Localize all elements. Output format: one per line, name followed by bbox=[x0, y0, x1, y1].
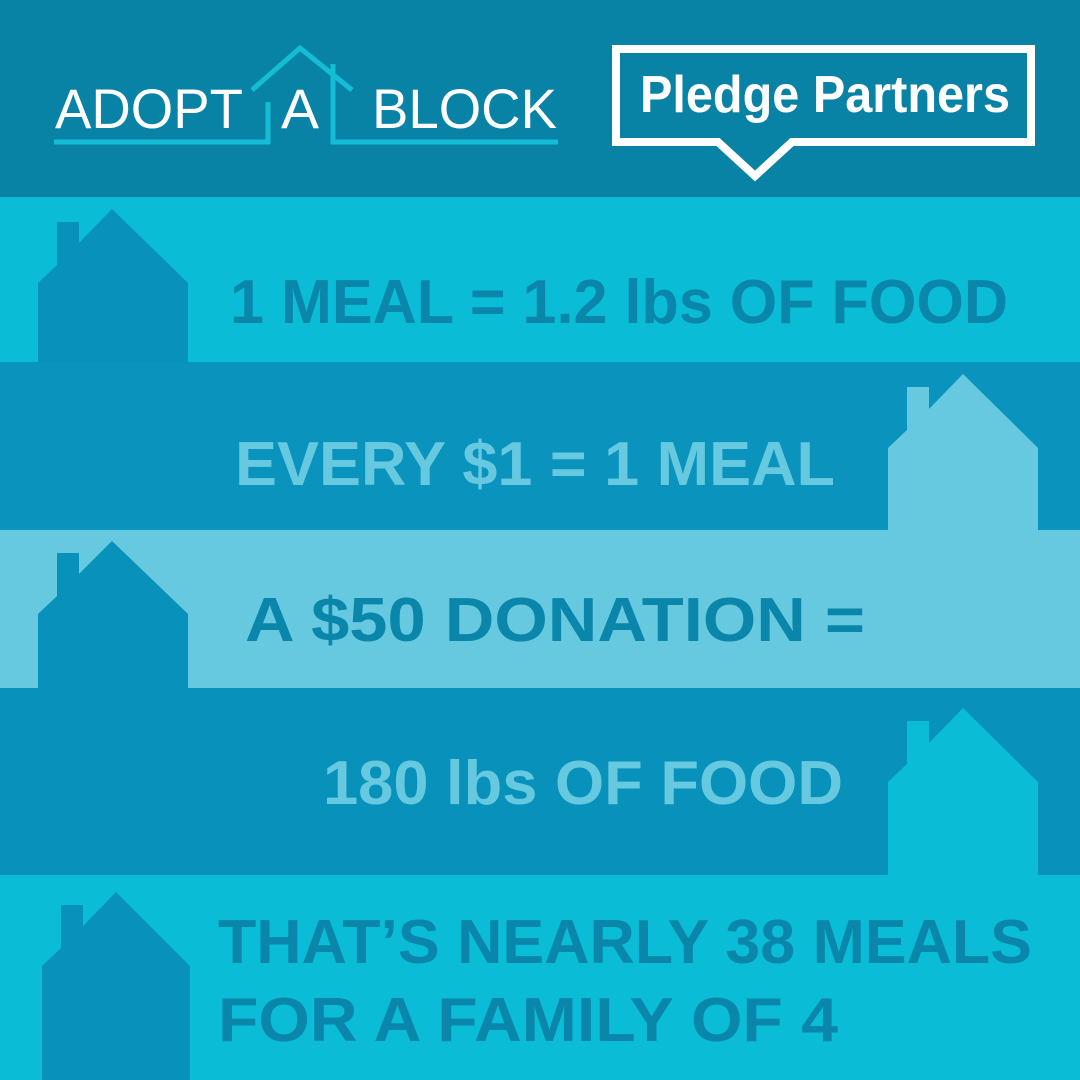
text: 180 lbs: 180 lbs OF FOOD bbox=[323, 749, 843, 818]
text: 38 meals: FOR A FAMILY OF 4 bbox=[218, 986, 839, 1055]
logo text: BLOCK bbox=[372, 77, 557, 140]
icon: house 4 bbox=[888, 708, 1038, 875]
text: every $1: EVERY $1 = 1 MEAL bbox=[235, 430, 835, 499]
band 1 bbox=[0, 197, 1080, 362]
logo text: ADOPT bbox=[55, 77, 243, 140]
icon: house 1 bbox=[38, 209, 188, 362]
pledge partners speech bubble bbox=[616, 49, 1031, 176]
text: $50 donation: A $50 DONATION = bbox=[245, 586, 865, 655]
logo text bbox=[55, 77, 557, 140]
logo text: A bbox=[281, 77, 320, 140]
logo house line bbox=[54, 48, 558, 142]
band 3 bbox=[0, 530, 1080, 688]
header band bbox=[0, 0, 1080, 197]
text: 38 meals: THAT’S NEARLY 38 MEALS bbox=[218, 908, 1032, 977]
icon: house 3 bbox=[38, 541, 188, 688]
band 5 bbox=[0, 875, 1080, 1080]
icon: house 5 bbox=[42, 892, 190, 1080]
band 2 bbox=[0, 362, 1080, 530]
text: 38 meals bbox=[218, 908, 1032, 1055]
text: 1 meal: 1 MEAL = 1.2 lbs OF FOOD bbox=[230, 268, 1008, 337]
pledge partners speech bubble: Pledge Partners bbox=[640, 66, 1010, 124]
band 4 bbox=[0, 688, 1080, 875]
icon: house 2 bbox=[888, 374, 1038, 530]
logo: adopt a block bbox=[54, 48, 558, 142]
